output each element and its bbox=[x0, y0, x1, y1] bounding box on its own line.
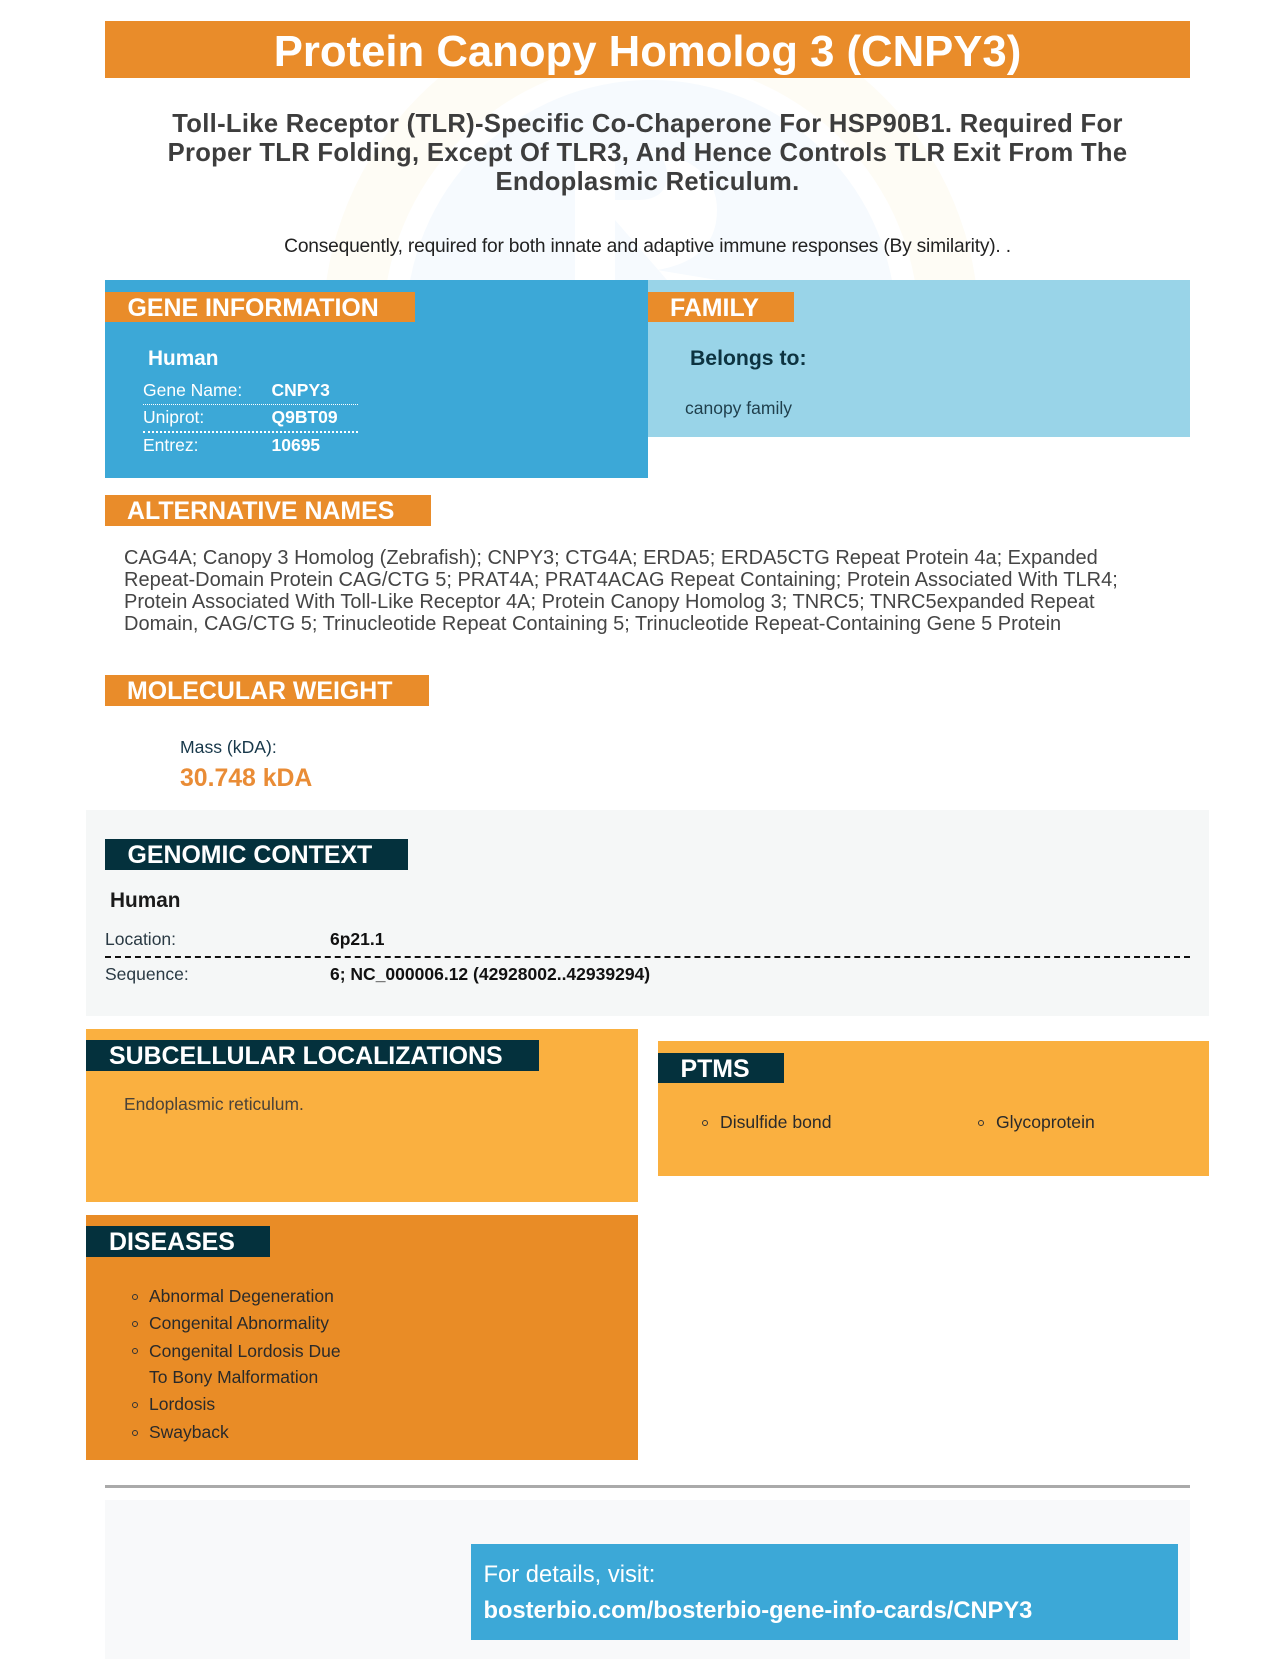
entrez row bbox=[143, 435, 320, 455]
sequence row bbox=[105, 964, 650, 984]
heading: gene information: GENE INFORMATION bbox=[128, 294, 379, 322]
panel: ptms bbox=[658, 1041, 1209, 1176]
heading: diseases bbox=[86, 1226, 270, 1257]
disease: congenital lordosis: Congenital Lordosis Due bbox=[149, 1341, 341, 1361]
subtitle: Proper TLR Folding, Except Of TLR3, And Hence Controls TLR Exit From The bbox=[168, 139, 1127, 167]
subtitle bbox=[168, 110, 1127, 196]
uniprot row: Q9BT09 bbox=[272, 407, 338, 427]
alternative names text: Repeat-Domain Protein CAG/CTG 5; PRAT4A; PRAT4ACAG Repeat Containing; Protein Associated With TLR4; bbox=[124, 569, 1118, 591]
heading: ptms bbox=[658, 1053, 784, 1083]
alternative names text: CAG4A; Canopy 3 Homolog (Zebrafish); CNPY3; CTG4A; ERDA5; ERDA5CTG Repeat Protein 4a; Expanded bbox=[124, 547, 1098, 569]
panel: genomic context bbox=[86, 810, 1209, 1016]
panel: diseases bbox=[86, 1215, 638, 1460]
gene name row: Gene Name: bbox=[143, 380, 242, 400]
watermark logo bbox=[327, 78, 975, 280]
disease: congenital lordosis: To Bony Malformation bbox=[149, 1367, 318, 1387]
disease: lordosis: Lordosis bbox=[149, 1394, 215, 1414]
belongs to: Belongs to: bbox=[690, 347, 807, 370]
details label: For details, visit: bbox=[484, 1561, 655, 1588]
description: Consequently, required for both innate and adaptive immune responses (By similarity). . bbox=[284, 236, 1011, 257]
panel: gene information bbox=[105, 280, 648, 478]
localization text: Endoplasmic reticulum. bbox=[124, 1094, 304, 1114]
uniprot row: Uniprot: bbox=[143, 407, 204, 427]
panel: family bbox=[648, 280, 1190, 437]
gene name row: CNPY3 bbox=[272, 380, 330, 400]
disease: congenital abnormality: Congenital Abnormality bbox=[149, 1313, 329, 1333]
subtitle: Endoplasmic Reticulum. bbox=[495, 168, 800, 196]
disease: swayback: Swayback bbox=[149, 1422, 229, 1442]
heading: alternative names: ALTERNATIVE NAMES bbox=[127, 497, 394, 525]
heading: subcellular localizations: SUBCELLULAR LOCALIZATIONS bbox=[109, 1042, 503, 1070]
panel: footer bbox=[105, 1500, 1190, 1659]
ptm item: glycoprotein: Glycoprotein bbox=[996, 1112, 1095, 1132]
species: Human bbox=[148, 347, 218, 370]
heading: genomic context: GENOMIC CONTEXT bbox=[128, 841, 372, 869]
callout: details link bbox=[471, 1544, 1178, 1640]
panel: subcellular localizations bbox=[86, 1029, 638, 1202]
mass value: 30.748 kDA bbox=[180, 765, 312, 792]
species: Human bbox=[110, 889, 180, 912]
sequence row: 6; NC_000006.12 (42928002..42939294) bbox=[330, 964, 650, 984]
heading: molecular weight: MOLECULAR WEIGHT bbox=[127, 677, 392, 705]
uniprot row bbox=[143, 405, 358, 433]
details url: bosterbio.com/bosterbio-gene-info-cards/CNPY3 bbox=[484, 1598, 1032, 1624]
location row: Location: bbox=[105, 929, 176, 949]
alternative names text bbox=[124, 547, 1118, 635]
location row: 6p21.1 bbox=[330, 929, 384, 949]
heading: ptms: PTMS bbox=[680, 1055, 750, 1083]
heading: family: FAMILY bbox=[670, 294, 759, 322]
title: Protein Canopy Homolog 3 (CNPY3) bbox=[274, 27, 1021, 76]
heading: diseases: DISEASES bbox=[109, 1228, 235, 1256]
sequence row: Sequence: bbox=[105, 964, 189, 984]
title bbox=[105, 21, 1190, 78]
subtitle: Toll-Like Receptor (TLR)-Specific Co-Chaperone For HSP90B1. Required For bbox=[172, 110, 1123, 138]
entrez row: Entrez: bbox=[143, 435, 198, 455]
family name: canopy family bbox=[685, 398, 792, 418]
entrez row: 10695 bbox=[272, 435, 320, 455]
disease: abnormal degeneration: Abnormal Degeneration bbox=[149, 1286, 334, 1306]
mass label: Mass (kDA): bbox=[180, 737, 277, 757]
ptm item: disulfide bond: Disulfide bond bbox=[720, 1112, 832, 1132]
location row bbox=[105, 926, 1190, 958]
heading: family bbox=[648, 292, 794, 322]
gene name row bbox=[143, 377, 358, 405]
alternative names text: Domain, CAG/CTG 5; Trinucleotide Repeat Containing 5; Trinucleotide Repeat-Containing Gene 5 Protein bbox=[124, 613, 1061, 635]
alternative names text: Protein Associated With Toll-Like Receptor 4A; Protein Canopy Homolog 3; TNRC5; TNRC5expanded Repeat bbox=[124, 591, 1094, 613]
disease list bbox=[132, 1286, 341, 1442]
disease: congenital lordosis bbox=[132, 1341, 341, 1387]
